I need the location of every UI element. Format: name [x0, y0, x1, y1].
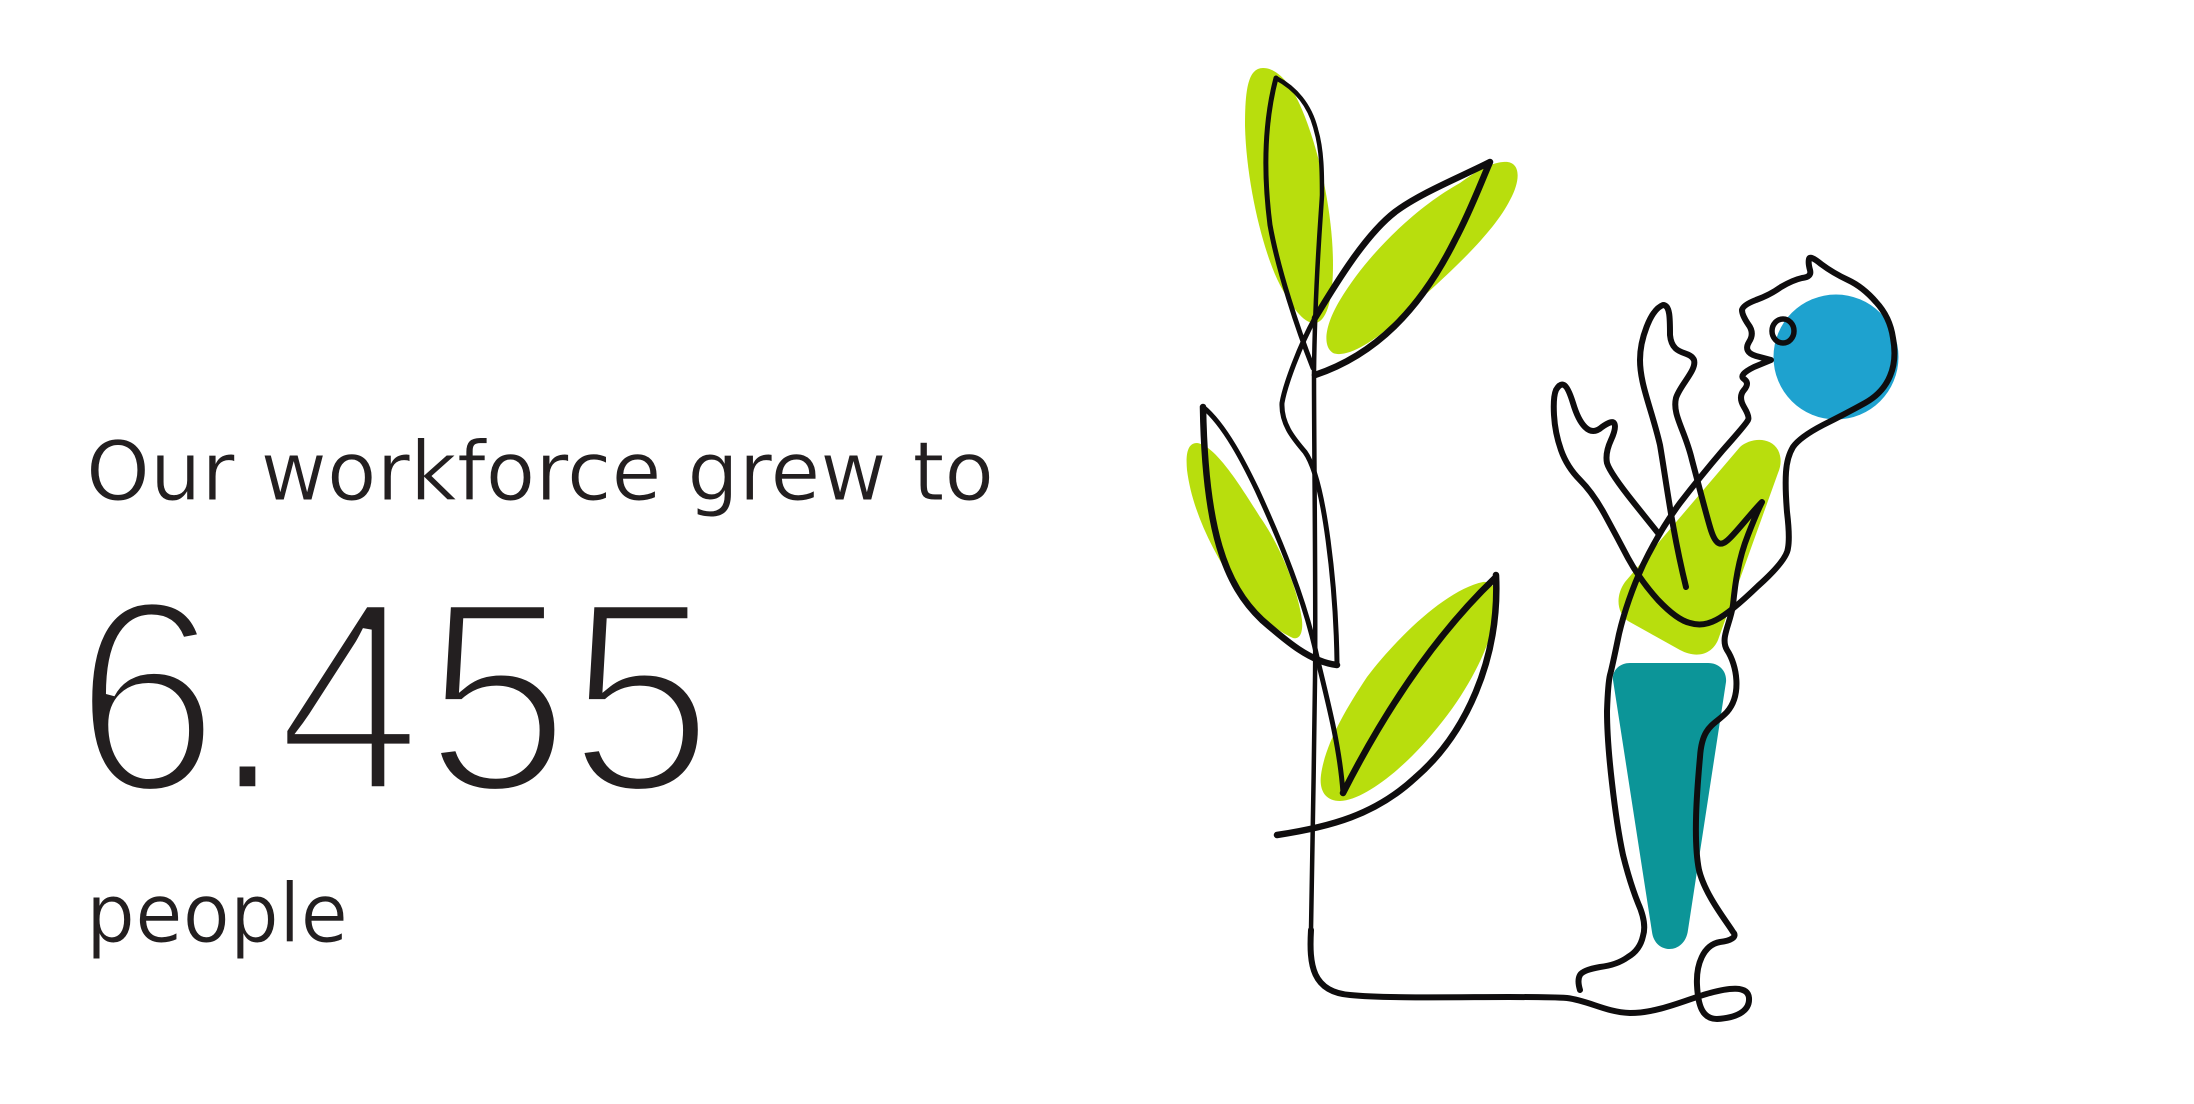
illustration: plant and person line drawing: [1187, 68, 1898, 1019]
text block: headline statistic: [74, 425, 994, 962]
colour shape: head circle: [1774, 294, 1898, 420]
leaf fill: lower right: [1321, 582, 1497, 801]
leaf outline: top left, outer edge: [1266, 78, 1313, 368]
connecting line between upper and lower leaves: [1282, 318, 1337, 663]
colour shape: leg: [1613, 663, 1726, 949]
leaf outline: top right: [1315, 162, 1490, 375]
icon: eye: [1772, 319, 1794, 343]
line art: plant: [1203, 78, 1762, 1019]
line art: body, head and far leg: [1554, 258, 1894, 990]
leaf fill: lower left: [1187, 443, 1302, 638]
leaf fill: top left: [1245, 68, 1333, 323]
leaf outline and stem: [1276, 78, 1322, 930]
heading: intro line: Our workforce grew to: [86, 425, 994, 520]
leaf fill: top right: [1326, 162, 1518, 354]
colour shape: torso: [1619, 440, 1781, 655]
ground line, foot and raised arm: [1311, 305, 1762, 1019]
leaf outline: lower right: [1343, 578, 1495, 793]
colour shapes: plant leaves: [1187, 68, 1518, 801]
leaf outline: lower left: [1203, 407, 1337, 665]
big number: 6.455: [74, 543, 713, 849]
label: people: people: [86, 867, 348, 962]
